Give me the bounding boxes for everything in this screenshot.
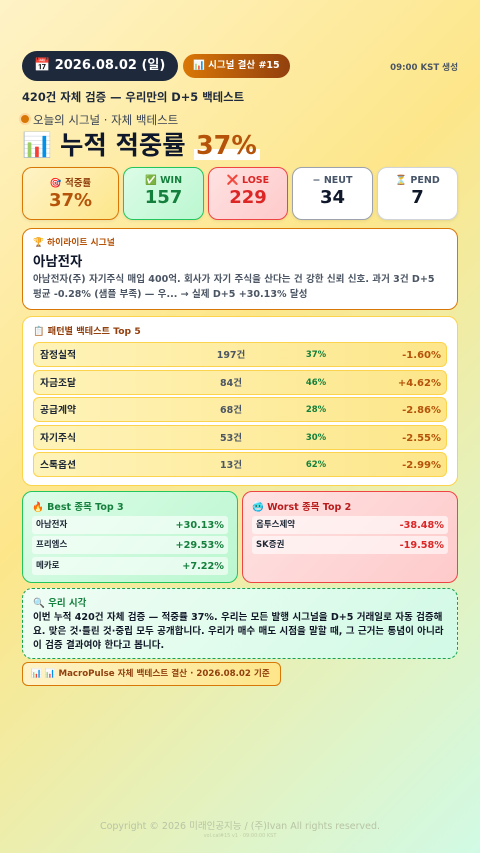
best item 2: +29.53% xyxy=(176,540,224,551)
row: stock options: 62% xyxy=(306,460,326,470)
row: funding: 자금조달 xyxy=(40,378,76,389)
row: supply contract: 28% xyxy=(306,405,326,415)
worst item 1: 옵투스제약 xyxy=(256,520,295,530)
version stamp: vol.cal#15 v1 · 09:00:00 KST xyxy=(204,833,276,839)
best item 1: +30.13% xyxy=(176,520,224,531)
highlight body: 아남전자(주) 자기주식 매입 400억. 회사가 자기 주식을 산다는 건 강한 신뢰 신호. 과거 3건 D+5 xyxy=(33,274,434,285)
stat: win xyxy=(123,167,204,220)
row: funding xyxy=(33,370,447,395)
highlight underline xyxy=(194,149,260,160)
best item 1: 아남전자 xyxy=(36,520,67,530)
highlight body xyxy=(33,274,434,300)
worst item 2: SK증권 xyxy=(256,540,284,550)
panel: best stocks xyxy=(22,491,238,583)
row: funding: 46% xyxy=(306,378,326,388)
best item 3: +7.22% xyxy=(182,561,224,572)
pattern heading: 📋 패턴별 백테스트 Top 5 xyxy=(33,326,141,337)
panel: our view xyxy=(22,588,458,659)
stat: lose: ❌ LOSE xyxy=(227,175,269,186)
subtitle: 420건 자체 검증 — 우리만의 D+5 백테스트 xyxy=(22,90,244,104)
row: stock options: -2.99% xyxy=(402,460,441,471)
stat: pending: ⏳ PEND xyxy=(395,175,440,186)
highlight name: 아남전자 xyxy=(33,255,82,270)
stat: neutral: − NEUT xyxy=(313,175,352,186)
best item 2 xyxy=(32,536,228,554)
row: earnings: 37% xyxy=(306,350,326,360)
eyebrow xyxy=(19,113,178,127)
footer chip: 📊 📊 MacroPulse 자체 백테스트 결산 · 2026.08.02 기준 xyxy=(31,669,270,679)
row: stock options xyxy=(33,452,447,477)
view text xyxy=(33,612,444,651)
stat: hit rate xyxy=(22,167,119,220)
worst item 2 xyxy=(252,536,448,554)
view text: 이 검증 결과여야 한다고 봅니다. xyxy=(33,640,164,651)
row: earnings: 197건 xyxy=(217,350,245,361)
date pill: 📅 2026.08.02 (일) xyxy=(34,58,165,73)
view heading: 🔍 우리 시각 xyxy=(33,598,86,609)
best item 2: 프리엠스 xyxy=(36,540,67,550)
stat: pending xyxy=(377,167,458,220)
row: treasury stock: 30% xyxy=(306,433,326,443)
copyright: Copyright © 2026 미래인공지능 / (주)Ivan All rights reserved. xyxy=(100,821,380,832)
row: earnings: 잠정실적 xyxy=(40,350,76,361)
best heading: 🔥 Best 종목 Top 3 xyxy=(32,502,124,513)
row: supply contract: 공급계약 xyxy=(40,405,76,416)
title value: 37% xyxy=(196,130,257,160)
panel: pattern backtest xyxy=(22,316,458,486)
stat: hit rate: 🎯 적중률 xyxy=(50,178,91,189)
row: supply contract xyxy=(33,397,447,422)
view text: 요. 맞은 것·틀린 것·중립 모두 공개합니다. 우리가 매수 매도 시점을 말할 때, 그 근거는 통념이 아니라 xyxy=(33,626,444,637)
row: supply contract: 68건 xyxy=(220,405,242,416)
stat: neutral xyxy=(292,167,373,220)
row: stock options: 13건 xyxy=(220,460,242,471)
generated time: 09:00 KST 생성 xyxy=(390,63,458,73)
signal badge: 📊 시그널 결산 #15 xyxy=(193,60,280,71)
worst item 1 xyxy=(252,516,448,534)
worst heading: 🥶 Worst 종목 Top 2 xyxy=(252,502,351,513)
row: supply contract: -2.86% xyxy=(402,405,441,416)
best item 1 xyxy=(32,516,228,534)
row: earnings: -1.60% xyxy=(402,350,441,361)
signal badge xyxy=(183,54,290,78)
row: treasury stock xyxy=(33,425,447,450)
row: treasury stock: 자기주식 xyxy=(40,433,76,444)
title icon: 📊 xyxy=(22,131,52,159)
panel: worst stocks xyxy=(242,491,458,583)
highlight label: 🏆 하이라이트 시그널 xyxy=(33,238,115,248)
stat: win: ✅ WIN xyxy=(145,175,182,186)
row: treasury stock: 53건 xyxy=(220,433,242,444)
worst item 2: -19.58% xyxy=(400,540,444,551)
date pill xyxy=(22,51,178,81)
footer chip xyxy=(22,662,281,686)
main title xyxy=(22,130,260,160)
row: stock options: 스톡옵션 xyxy=(40,460,76,471)
stat: pending: 7 xyxy=(411,187,424,208)
row: funding: +4.62% xyxy=(398,378,441,389)
eyebrow text: 오늘의 시그널 · 자체 백테스트 xyxy=(33,113,178,127)
highlight body: 평균 -0.28% (샘플 부족) — 우... → 실제 D+5 +30.13% 달성 xyxy=(33,288,307,300)
view text: 이번 누적 420건 자체 검증 — 적중률 37%. 우리는 모든 발행 시그널을 D+5 거래일로 자동 검증해 xyxy=(33,612,442,623)
best item 3 xyxy=(32,557,228,575)
stat: win: 157 xyxy=(145,187,182,208)
best item 3: 메카로 xyxy=(36,561,59,571)
worst item 1: -38.48% xyxy=(400,520,444,531)
stat: hit rate: 37% xyxy=(49,190,92,211)
stat: neutral: 34 xyxy=(320,187,345,208)
row: funding: 84건 xyxy=(220,378,242,389)
stat: lose xyxy=(208,167,288,220)
row: treasury stock: -2.55% xyxy=(402,433,441,444)
panel: highlight signal xyxy=(22,228,458,310)
pulse dot xyxy=(19,113,31,125)
row: earnings xyxy=(33,342,447,367)
stat: lose: 229 xyxy=(229,187,267,208)
title text: 누적 적중률 xyxy=(60,130,186,160)
